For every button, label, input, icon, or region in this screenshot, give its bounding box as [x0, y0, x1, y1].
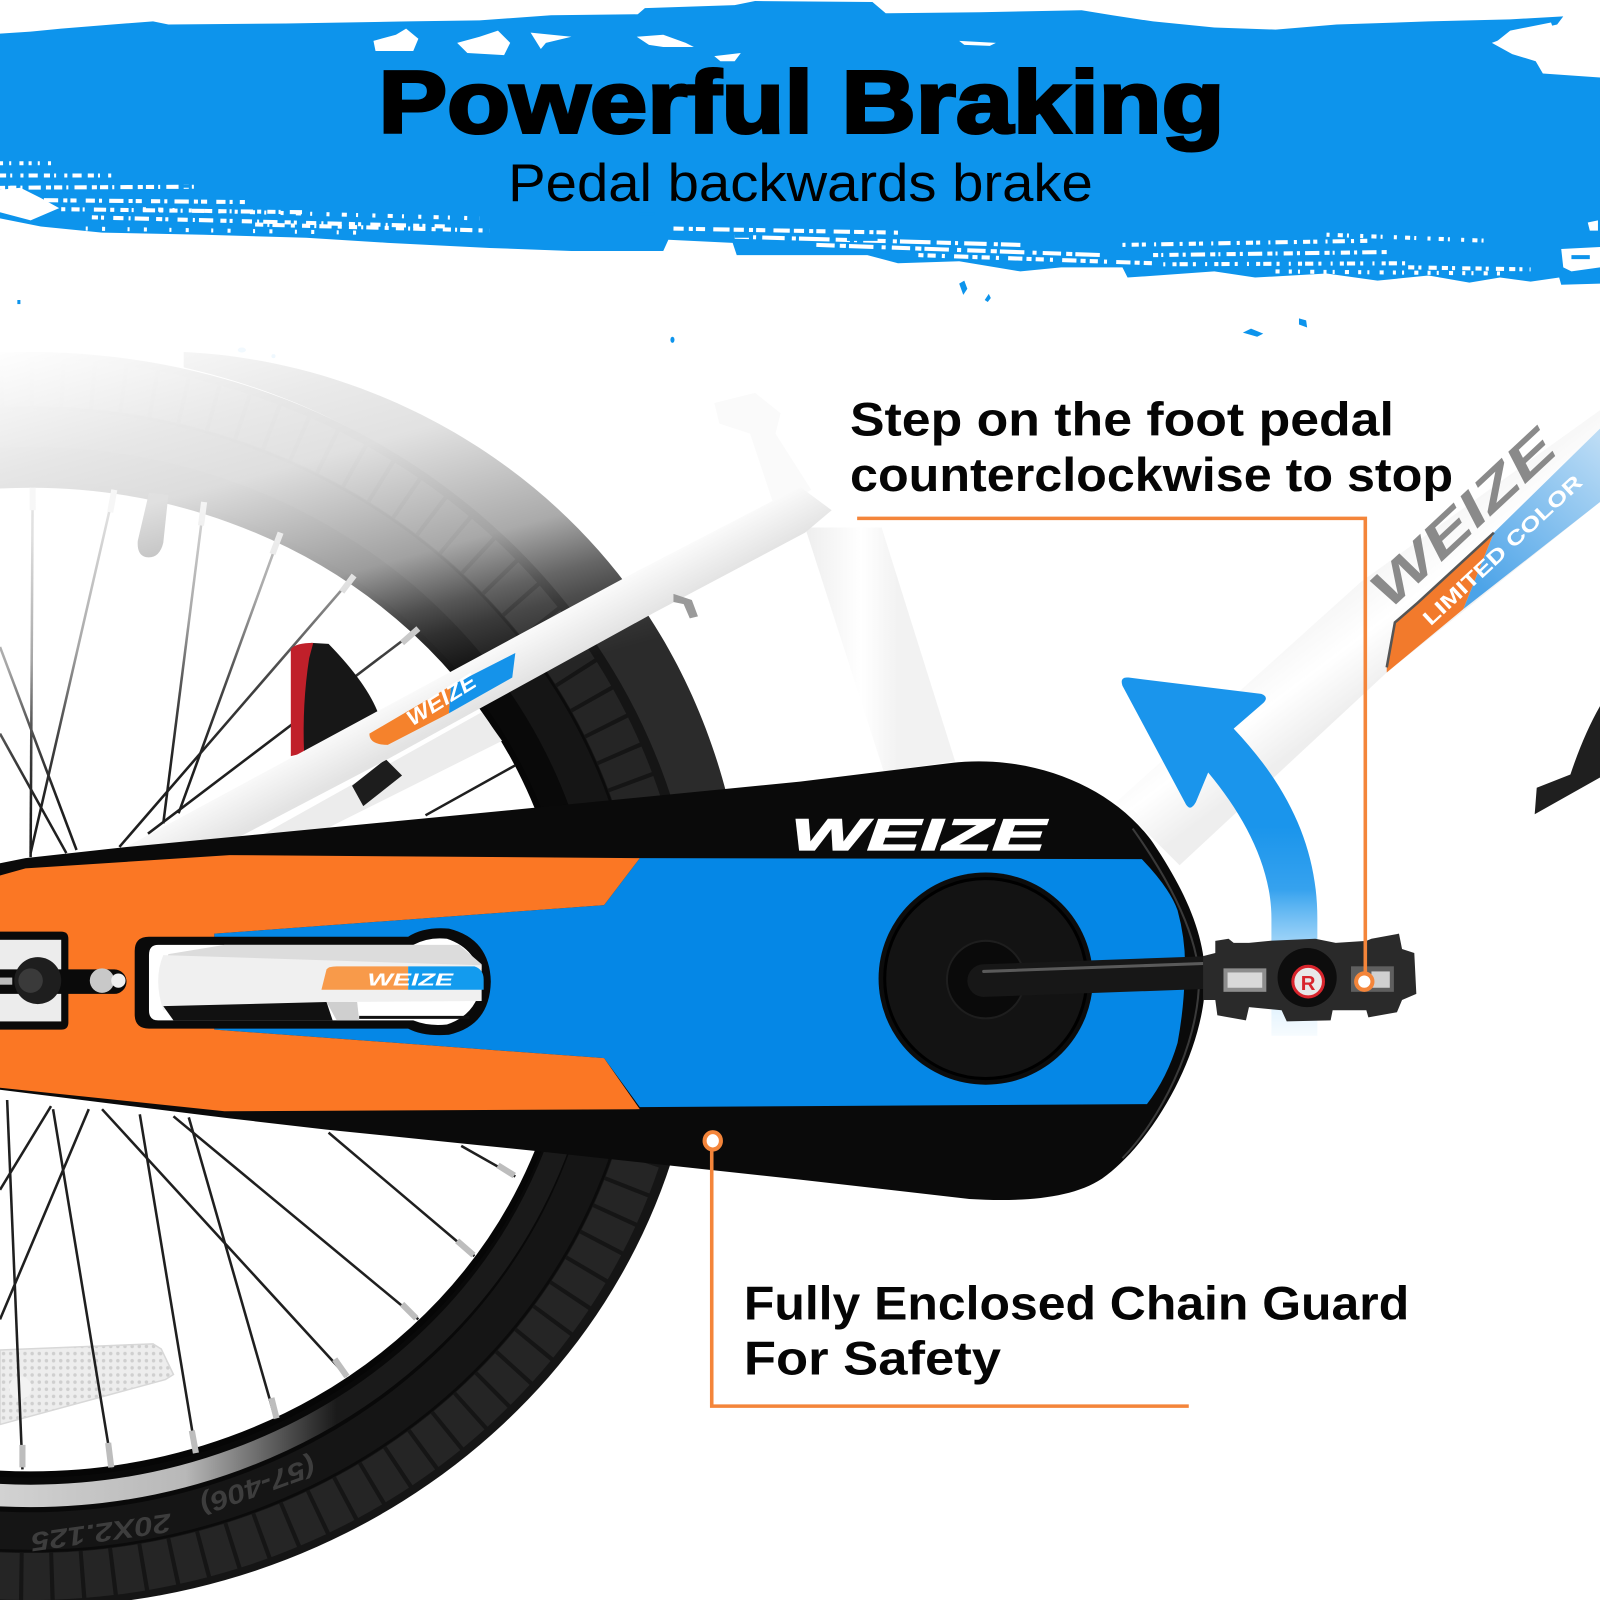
- guard logo: WEIZE: [791, 809, 1050, 860]
- tube behind the slot: [163, 945, 482, 969]
- leader line: [857, 518, 1365, 974]
- pedal: [1203, 934, 1416, 1021]
- callout text: [744, 1277, 1409, 1384]
- tyre tread: [0, 383, 666, 1577]
- top callout: [850, 394, 1453, 990]
- main slot window: WEIZE: [367, 970, 454, 990]
- seat stay decal: WEIZE: [402, 669, 481, 731]
- rear wheel: [0, 352, 727, 1600]
- seat tube: [805, 528, 955, 771]
- brake clamp: [352, 759, 402, 806]
- sidewall text: 20X2.125: [28, 1508, 174, 1557]
- callout text: [850, 394, 1453, 501]
- leader dot: [705, 1132, 721, 1149]
- left slot window: [0, 932, 127, 1030]
- paint splatter dots: [17, 281, 1307, 379]
- tyre: [0, 352, 700, 1600]
- guard edge highlight: [1122, 829, 1199, 1158]
- blue brush stroke banner: [0, 1, 1600, 285]
- callout text: For Safety: [744, 1332, 1001, 1384]
- fender bolt: [673, 594, 698, 618]
- callout text: Fully Enclosed Chain Guard: [744, 1277, 1409, 1329]
- down tube decal: WEIZE: [1358, 416, 1570, 618]
- bike frame: [120, 393, 1600, 865]
- main slot window: [135, 928, 491, 1035]
- spoke nipples: [22, 488, 514, 1467]
- down tube decal: LIMITED COLOR: [1419, 471, 1587, 630]
- kickstand at right edge: [1535, 706, 1600, 814]
- guard blue panel: [214, 858, 1185, 1107]
- seat stay main tube: [120, 487, 832, 850]
- callout text: Step on the foot pedal: [850, 394, 1394, 446]
- seat stay lower tube: [255, 712, 502, 839]
- pedal reflector logo: R: [1301, 973, 1316, 995]
- slot tube decal: [321, 966, 408, 990]
- paint speckles: [0, 22, 1600, 273]
- pedal reflector logo: [1293, 966, 1323, 997]
- down tube decal: [1358, 416, 1600, 672]
- leader dot: [1356, 973, 1372, 990]
- down tube: [1116, 410, 1600, 865]
- rim reflection: [0, 1152, 566, 1508]
- crank disc: [879, 872, 1093, 1085]
- spokes: [0, 488, 515, 1469]
- blue arrow: [1122, 677, 1317, 1036]
- rear wheel: (57-406): [196, 1451, 320, 1521]
- rim: [0, 447, 600, 1512]
- callout text: counterclockwise to stop: [850, 449, 1453, 501]
- chain guard: [0, 761, 1205, 1200]
- guard black shell: [0, 761, 1205, 1200]
- leader line: [712, 1149, 1189, 1406]
- crank arm: [984, 963, 1210, 981]
- fade overlay on upper wheel: [0, 347, 806, 827]
- title: Powerful Braking: [379, 54, 1224, 152]
- seat tube top and pedal ghost: [714, 393, 811, 510]
- valve: [138, 493, 168, 557]
- guard orange panel: [0, 855, 640, 1111]
- fender: [184, 352, 727, 806]
- rear reflector light: [291, 643, 379, 756]
- subtitle: Pedal backwards brake: [508, 154, 1093, 213]
- seat stay decal: [369, 653, 515, 745]
- reflector on lower spokes: [0, 1344, 173, 1424]
- bottom callout: [705, 1132, 1409, 1406]
